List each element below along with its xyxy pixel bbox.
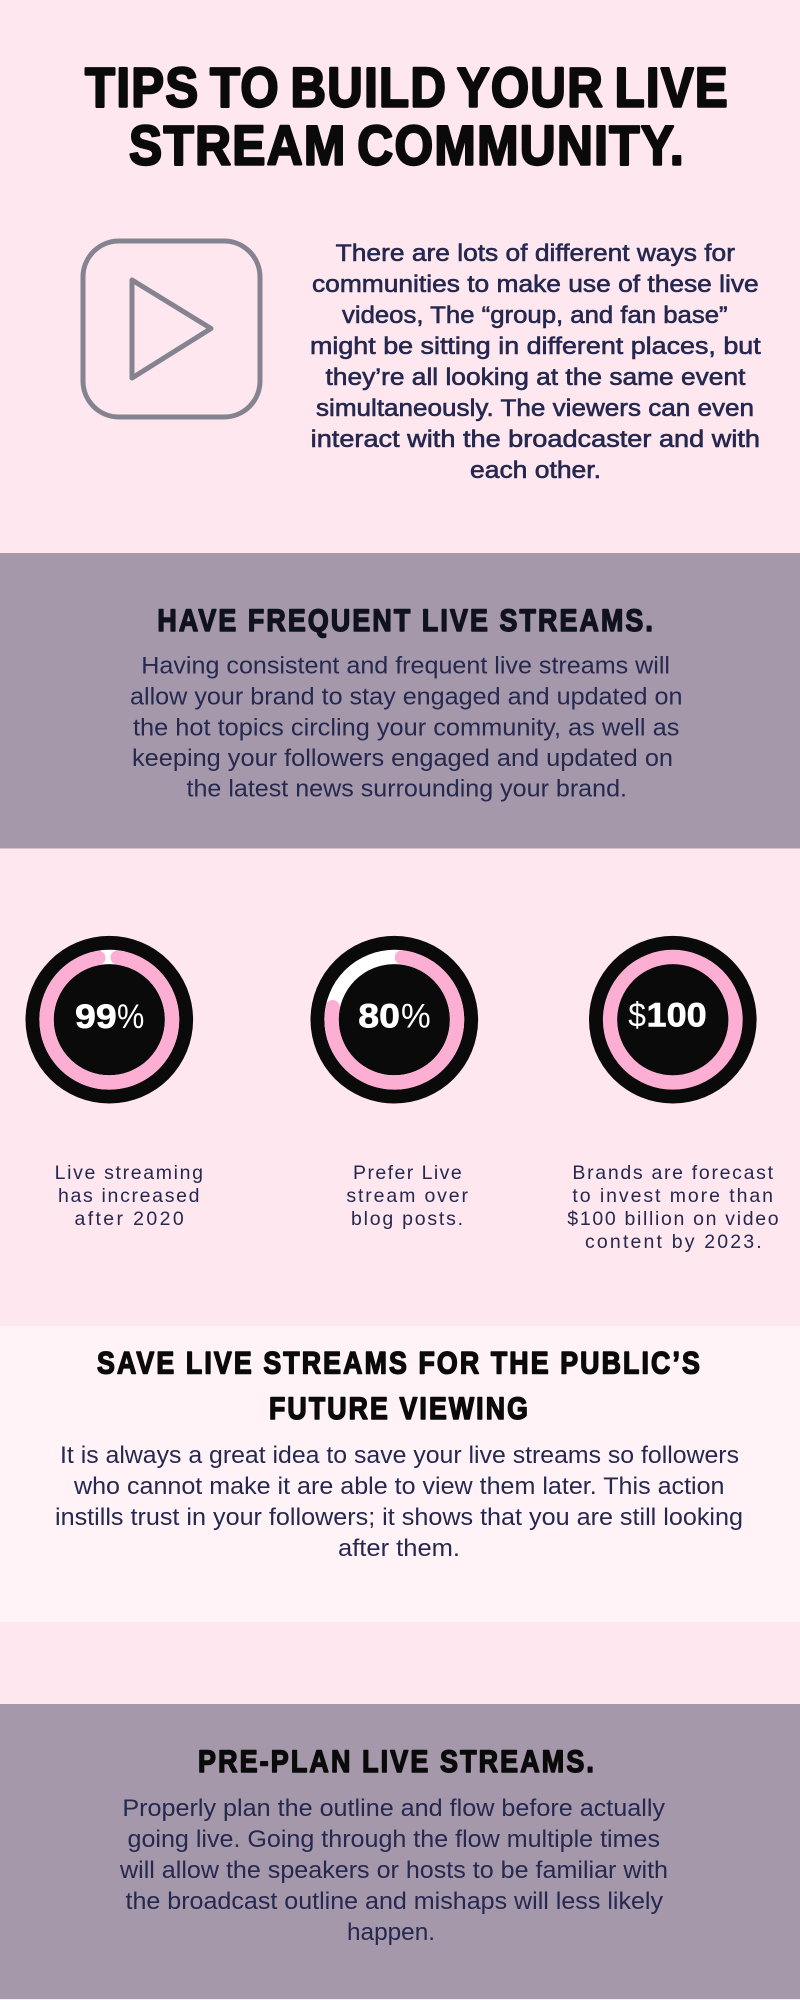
caption: prefer live stream: Prefer Live	[353, 1162, 462, 1184]
caption: brands forecast: content by 2023.	[585, 1231, 762, 1253]
stat: 99% donut: %	[117, 998, 144, 1036]
text block: pre-plan live streams: happen.	[347, 1919, 435, 1946]
heading: have frequent live streams: HAVE FREQUENT LIVE STREAMS.	[157, 602, 655, 638]
stat: 99% donut	[26, 936, 193, 1104]
panel: have frequent live streams	[0, 553, 800, 848]
stat: 80% donut	[310, 936, 478, 1104]
text block: pre-plan live streams: the broadcast outline and mishaps will less likely	[126, 1888, 663, 1915]
panel: pre-plan live streams	[0, 1704, 800, 1999]
heading: save live streams	[97, 1344, 702, 1426]
stat: 99% donut: 99	[75, 998, 117, 1036]
stat: 80% donut: %	[401, 998, 431, 1036]
caption: brands forecast: Brands are forecast	[572, 1162, 774, 1184]
caption: prefer live stream	[346, 1162, 468, 1230]
intro text block: they’re all looking at the same event	[326, 364, 746, 391]
text block: pre-plan live streams: will allow the speakers or hosts to be familiar with	[119, 1857, 668, 1884]
text block: save live streams: It is always a great idea to save your live streams so followers	[60, 1442, 739, 1469]
caption: prefer live stream: stream over	[346, 1185, 468, 1207]
intro text block: videos, The “group, and fan base”	[342, 302, 728, 329]
text block: have frequent live streams: allow your brand to stay engaged and updated on	[130, 683, 682, 710]
intro text block: interact with the broadcaster and with	[311, 426, 760, 453]
icon: play button	[83, 241, 260, 417]
text block: have frequent live streams: the hot topics circling your community, as well as	[133, 714, 679, 741]
heading: pre-plan live streams: PRE-PLAN LIVE STREAMS.	[198, 1743, 596, 1779]
caption: brands forecast: to invest more than	[572, 1185, 773, 1207]
text block: save live streams	[55, 1442, 743, 1562]
heading: save live streams: FUTURE VIEWING	[269, 1390, 530, 1426]
title	[85, 56, 729, 176]
intro text block: communities to make use of these live	[312, 271, 759, 298]
caption: brands forecast: $100 billion on video	[567, 1208, 779, 1230]
intro text block: might be sitting in different places, but	[310, 333, 761, 360]
text block: save live streams: who cannot make it are able to view them later. This action	[73, 1473, 725, 1500]
caption: prefer live stream: blog posts.	[351, 1208, 463, 1230]
stat: 80% donut: 80	[358, 998, 400, 1036]
caption: live streaming: has increased	[58, 1185, 200, 1207]
intro text block: simultaneously. The viewers can even	[316, 395, 754, 422]
stat: $100 donut	[589, 936, 757, 1104]
intro text block	[310, 240, 761, 484]
text block: save live streams: instills trust in your followers; it shows that you are still looking	[55, 1504, 743, 1531]
title: STREAM COMMUNITY.	[129, 114, 685, 176]
heading: save live streams: SAVE LIVE STREAMS FOR THE PUBLIC’S	[97, 1344, 702, 1380]
intro text block: each other.	[470, 457, 601, 484]
panel: save live streams	[0, 1326, 800, 1622]
text block: save live streams: after them.	[338, 1535, 460, 1562]
stat: $100 donut: 100	[646, 997, 707, 1035]
stat: $100 donut: $	[628, 997, 646, 1035]
text block: pre-plan live streams: Properly plan the outline and flow before actually	[122, 1795, 665, 1822]
caption: live streaming: Live streaming	[55, 1162, 203, 1184]
intro text block: There are lots of different ways for	[336, 240, 735, 267]
text block: have frequent live streams: Having consistent and frequent live streams will	[141, 652, 670, 679]
caption: live streaming	[55, 1162, 203, 1230]
text block: have frequent live streams: keeping your followers engaged and updated on	[132, 745, 673, 772]
caption: live streaming: after 2020	[74, 1208, 184, 1230]
caption: brands forecast	[567, 1162, 779, 1253]
text block: have frequent live streams: the latest news surrounding your brand.	[186, 776, 627, 803]
text block: pre-plan live streams: going live. Going through the flow multiple times	[128, 1826, 660, 1853]
text block: have frequent live streams	[130, 652, 682, 803]
title: TIPS TO BUILD YOUR LIVE	[85, 56, 729, 118]
text block: pre-plan live streams	[119, 1795, 668, 1946]
